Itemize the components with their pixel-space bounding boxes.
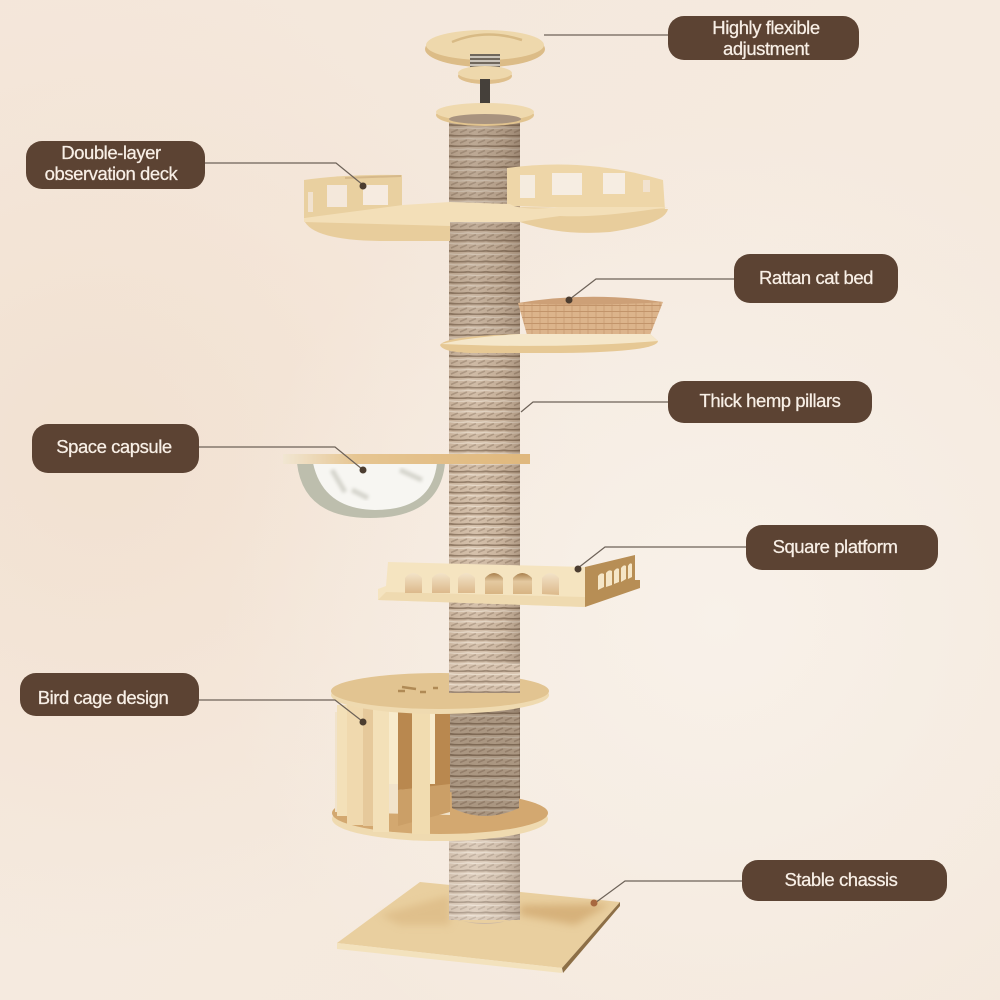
callout: highly flexible adjustment <box>544 16 859 60</box>
callout: highly flexible adjustment: Highly flexible <box>712 17 820 38</box>
bars <box>337 705 435 834</box>
pillar front section above <box>449 664 520 693</box>
callout: square platform: Square platform <box>773 536 897 557</box>
callout: square platform <box>574 525 938 572</box>
callout: observation deck <box>26 141 366 190</box>
callout: bird cage design <box>20 673 366 726</box>
square platform <box>378 555 640 607</box>
arched windows <box>405 573 559 595</box>
space capsule <box>283 454 530 518</box>
callout: stable chassis <box>590 860 947 906</box>
rattan cat bed <box>440 297 663 353</box>
callout: space capsule: Space capsule <box>56 436 172 457</box>
callout: observation deck: observation deck <box>45 163 179 184</box>
pillar inside cage <box>450 712 519 816</box>
callout: bird cage design: Bird cage design <box>38 687 168 708</box>
left rail <box>304 175 402 222</box>
top disc <box>331 676 549 714</box>
right rail <box>507 164 665 210</box>
callout: stable chassis: Stable chassis <box>785 869 898 890</box>
base: stable chassis <box>337 882 620 973</box>
observation deck <box>304 164 668 241</box>
platform top <box>304 202 668 226</box>
hemp pillar <box>449 118 520 924</box>
callout: observation deck: Double-layer <box>61 142 161 163</box>
callout: space capsule <box>32 424 366 474</box>
platform underside <box>304 207 668 241</box>
callout: thick hemp pillars: Thick hemp pillars <box>700 390 841 411</box>
ceiling adjuster <box>425 30 545 126</box>
callout: rattan cat bed: Rattan cat bed <box>759 267 873 288</box>
lower disc <box>332 797 548 841</box>
callout: thick hemp pillars <box>521 381 872 423</box>
callout: rattan cat bed <box>566 254 898 304</box>
callout: highly flexible adjustment: adjustment <box>723 38 809 59</box>
bird cage <box>331 664 549 841</box>
cage interior <box>335 712 450 815</box>
